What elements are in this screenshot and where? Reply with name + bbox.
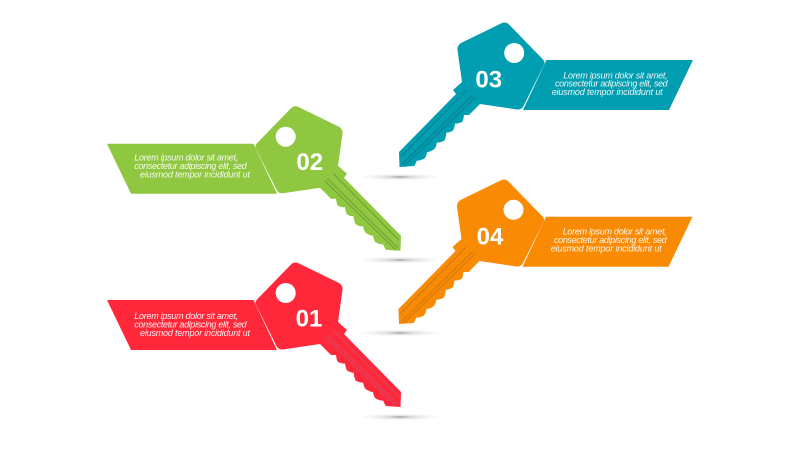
shadow: key 04 (358, 330, 442, 336)
panel: 02 label (107, 144, 277, 194)
key 04 (398, 180, 544, 324)
key 04 hole (504, 200, 524, 220)
text 01: eiusmod tempor incididunt ut (140, 328, 250, 338)
number 04: 04 (477, 223, 504, 250)
text 02: consectetur adipiscing elit, sed (134, 161, 248, 171)
text 03: eiusmod tempor incididunt ut (552, 87, 663, 97)
panel: 04 label (522, 217, 692, 267)
key 03 (399, 22, 545, 167)
key 02 hole (276, 127, 296, 147)
shadow: key 02 (358, 256, 442, 264)
shadow: key 03 (358, 174, 442, 180)
text 04: Lorem ipsum dolor sit amet, (563, 226, 667, 236)
item 04: orange key (398, 180, 692, 324)
text 04: eiusmod tempor incididunt ut (551, 243, 662, 253)
key 02 ridges (325, 174, 399, 250)
panel: 03 label (523, 60, 693, 110)
key 04 ridges (400, 247, 474, 324)
key 03 ridges (401, 90, 475, 166)
text 02: eiusmod tempor incididunt ut (140, 169, 250, 179)
text 02: Lorem ipsum dolor sit amet, (134, 153, 238, 163)
text 01: Lorem ipsum dolor sit amet, (134, 311, 238, 321)
key 02 (255, 106, 401, 251)
number 01: 01 (296, 306, 322, 332)
key 01 (255, 262, 401, 407)
item 02: green key (107, 106, 401, 251)
key 03 hole (504, 43, 524, 63)
item 01: red key (107, 262, 401, 407)
text 03: consectetur adipiscing elit, sed (555, 79, 669, 89)
key 01 hole (276, 283, 296, 303)
text 01: consectetur adipiscing elit, sed (134, 320, 248, 330)
text 03: Lorem ipsum dolor sit amet, (563, 70, 668, 80)
item 03: teal key (399, 22, 693, 167)
shadow: key 01 (358, 414, 442, 420)
key 01 ridges (325, 330, 399, 406)
number 03: 03 (475, 66, 502, 94)
number 02: 02 (296, 149, 323, 176)
panel: 01 label (107, 300, 277, 350)
text 04: consectetur adipiscing elit, sed (554, 235, 668, 245)
